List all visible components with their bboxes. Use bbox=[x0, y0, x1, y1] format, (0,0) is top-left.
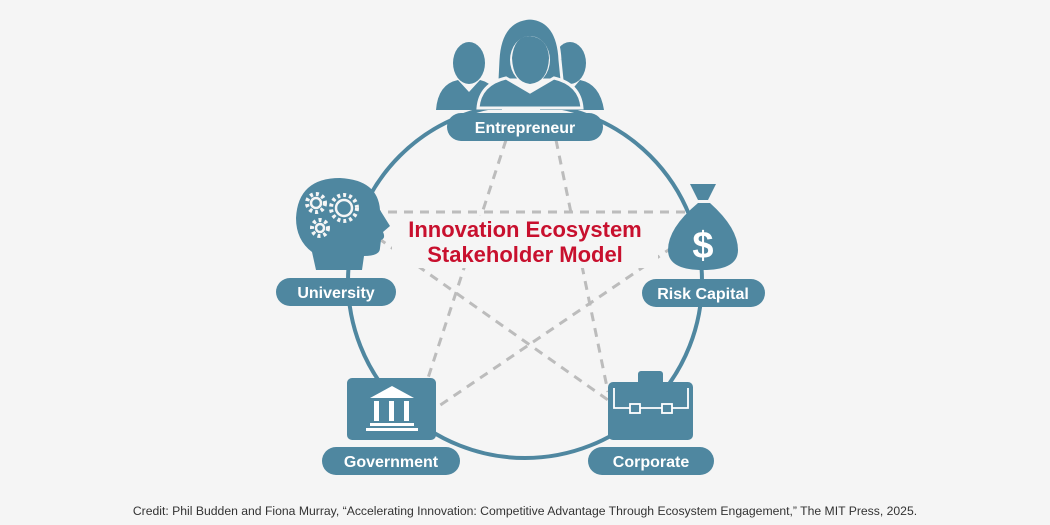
label: Entrepreneur bbox=[447, 113, 603, 141]
title: Innovation Ecosystem bbox=[408, 217, 642, 242]
circle ring bbox=[348, 104, 702, 458]
dashed star connections bbox=[372, 140, 688, 408]
label: Government: Government bbox=[344, 454, 439, 471]
label: University bbox=[276, 278, 396, 306]
label: Risk Capital: Risk Capital bbox=[657, 286, 749, 303]
icon: money bag: $ bbox=[692, 225, 714, 267]
icon: money bag bbox=[668, 184, 738, 270]
label: Government bbox=[322, 447, 460, 475]
credit: Credit: Phil Budden and Fiona Murray, “Accelerating Innovation: Competitive Advantage Through Ecosystem Engagement,” The MIT Press, 2025. bbox=[133, 504, 917, 518]
title bbox=[392, 216, 658, 268]
icon: entrepreneur people bbox=[436, 18, 604, 110]
label: Entrepreneur: Entrepreneur bbox=[475, 120, 575, 137]
title: Stakeholder Model bbox=[427, 242, 623, 267]
label: Corporate bbox=[588, 447, 714, 475]
label: Risk Capital bbox=[642, 279, 765, 307]
icon: university head with gears bbox=[296, 178, 390, 270]
icon: government building bbox=[347, 378, 436, 440]
label: University: University bbox=[297, 285, 375, 302]
label: Corporate: Corporate bbox=[613, 454, 689, 471]
icon: briefcase bbox=[608, 371, 693, 440]
